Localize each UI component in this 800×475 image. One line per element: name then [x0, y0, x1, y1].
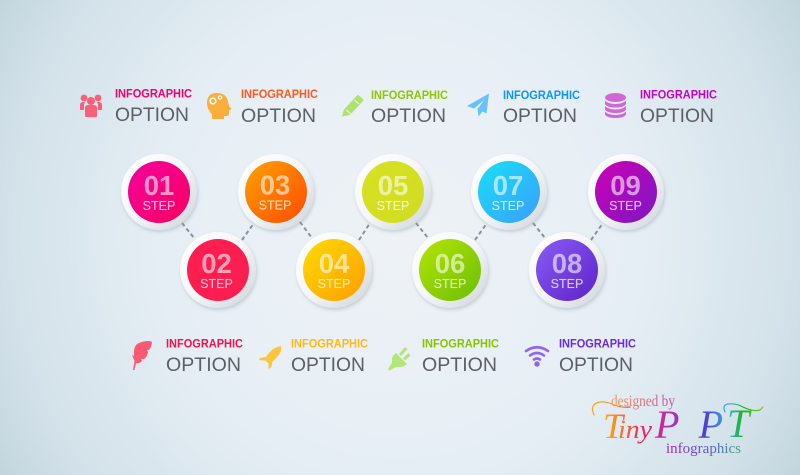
bottom option: plug: [388, 336, 499, 376]
step 07: STEP: [492, 199, 524, 213]
step 03: STEP: [259, 198, 291, 212]
top option: pencil: OPTION: [371, 106, 446, 127]
top option: team: [80, 86, 192, 126]
icon: plug: [388, 347, 410, 370]
logo: designed by Tiny PPT infographics: T: [727, 401, 752, 446]
top option: pencil: [342, 88, 448, 127]
logo: designed by Tiny PPT infographics: designed by: [611, 393, 675, 410]
step 02: [180, 232, 256, 308]
bottom option: feather: OPTION: [166, 355, 241, 376]
logo: designed by Tiny PPT infographics: PP: [654, 402, 723, 447]
step 09: 09: [610, 170, 641, 201]
bottom option: rocket: OPTION: [291, 355, 365, 376]
logo: designed by Tiny PPT infographics: [592, 393, 763, 457]
step 03: [238, 154, 314, 230]
top option: paper plane: OPTION: [503, 106, 577, 127]
step 01: 01: [144, 170, 174, 201]
step 02: 02: [201, 248, 232, 279]
top option: team: OPTION: [115, 105, 189, 126]
icon: feather: [132, 341, 152, 370]
step 08: 08: [552, 248, 582, 279]
top option: database: OPTION: [640, 106, 714, 127]
icon: rocket: [259, 346, 281, 369]
bottom option: feather: INFOGRAPHIC: [166, 336, 243, 350]
bottom option: plug: INFOGRAPHIC: [422, 336, 499, 350]
icon: wifi: [526, 347, 548, 365]
bottom option: rocket: [259, 336, 368, 376]
step 06: STEP: [434, 277, 466, 291]
bottom option: feather: [132, 336, 243, 376]
top option: ideas: OPTION: [241, 106, 316, 127]
step 05: 05: [378, 170, 408, 201]
top option: database: [605, 88, 717, 127]
step 05: [355, 154, 431, 230]
icon: people: [80, 95, 102, 117]
step 04: [296, 232, 372, 308]
top option: ideas: INFOGRAPHIC: [241, 87, 318, 101]
step 05: STEP: [377, 199, 409, 213]
bottom option: wifi: INFOGRAPHIC: [559, 336, 636, 350]
step 06: 06: [435, 248, 465, 279]
step 06: [412, 232, 488, 308]
step 01: STEP: [143, 199, 175, 213]
dashed connectors: [182, 222, 603, 240]
logo: designed by Tiny PPT infographics: T: [603, 406, 626, 446]
bottom option: plug: OPTION: [422, 355, 497, 376]
logo swashes: [592, 402, 763, 415]
bottom option: wifi: OPTION: [559, 355, 633, 376]
bottom option: wifi: [526, 336, 636, 376]
icon: database: [605, 93, 626, 118]
logo: designed by Tiny PPT infographics: iny: [618, 415, 652, 444]
step 04: STEP: [318, 277, 350, 291]
step 09: STEP: [609, 199, 642, 213]
step 08: STEP: [551, 277, 583, 291]
top option: team: INFOGRAPHIC: [115, 86, 192, 100]
step 09: [588, 154, 664, 230]
step 02: STEP: [200, 277, 233, 291]
step 04: 04: [319, 248, 350, 279]
top option: paper plane: INFOGRAPHIC: [503, 88, 580, 102]
top option: ideas: [207, 87, 318, 127]
step 07: [471, 154, 547, 230]
logo: designed by Tiny PPT infographics: infographics: [666, 441, 741, 457]
step 03: 03: [260, 170, 290, 200]
top option: pencil: INFOGRAPHIC: [371, 88, 448, 102]
step 08: [529, 232, 605, 308]
icon: head with gears: [207, 93, 232, 119]
bottom option: rocket: INFOGRAPHIC: [291, 336, 368, 350]
top option: database: INFOGRAPHIC: [640, 88, 717, 102]
step 01: [121, 154, 197, 230]
top option: paper plane: [467, 88, 580, 127]
icon: pencil: [342, 95, 364, 116]
step 07: 07: [493, 170, 523, 201]
icon: paper plane: [467, 94, 489, 116]
